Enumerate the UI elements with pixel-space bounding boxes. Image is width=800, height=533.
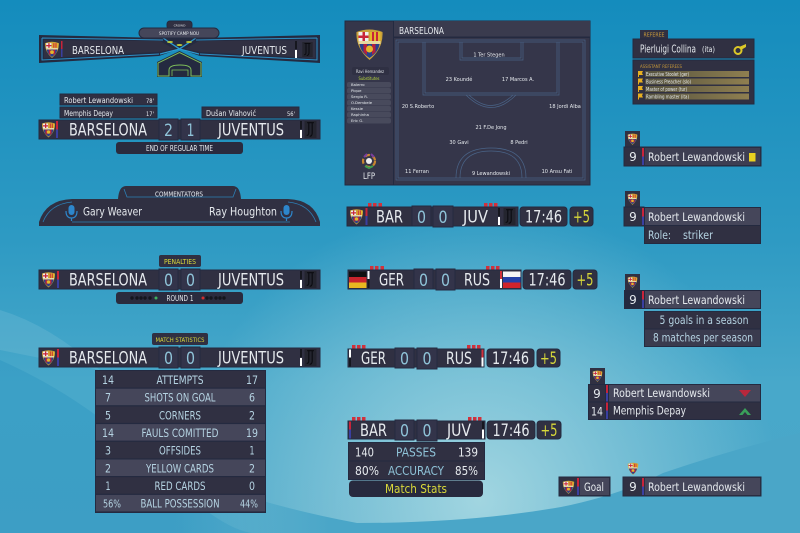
match statistics table: 0: [249, 479, 255, 493]
commentators panel: [39, 186, 320, 226]
scorebug: GER v RUS compact: GER: [361, 349, 386, 368]
scorebug: BAR v JUV compact: 0: [400, 422, 409, 442]
goal scorers: Memphis Depay: [64, 109, 113, 118]
panel: team lineup: Balerro: [351, 82, 365, 87]
referee tab: [640, 30, 668, 38]
match statistics tab: [152, 333, 208, 345]
player card: goal scorer: Robert Lewandowski: [648, 480, 745, 494]
player card: role: striker: [683, 228, 713, 242]
player card: role: [624, 191, 761, 244]
player card: role: 9: [629, 210, 637, 224]
scorebug: BAR v JUV with crests: BAR: [376, 208, 403, 226]
panel: team lineup: Substitutes: [358, 76, 380, 82]
goal scorers: Dušan Vlahović: [206, 109, 256, 118]
player card: goal scorer: 9: [629, 480, 637, 494]
match stats button: Match Stats: [385, 482, 447, 496]
scorebug: BAR v JUV with crests: JUV: [462, 208, 489, 226]
scoreboard: match statistics: 0: [186, 349, 195, 369]
scorebug: GER v RUS with flags: RUS: [464, 270, 490, 290]
panel: team lineup: 11 Ferran: [405, 169, 429, 175]
match stats button: [349, 480, 483, 497]
scoreboard: penalties: JUVENTUS: [217, 270, 284, 290]
player card: substitution: 9: [593, 387, 601, 401]
player card: season stats: Robert Lewandowski: [648, 293, 745, 307]
scorebug: GER v RUS compact: [348, 345, 560, 370]
referee panel: [633, 39, 754, 58]
assistant referees panel: Master of power (tur): [646, 87, 687, 93]
scorebug: GER v RUS with flags: [348, 266, 597, 291]
passes and accuracy table: [348, 442, 485, 480]
player card: yellow card: [624, 131, 761, 166]
penalties tab: PENALTIES: [164, 258, 196, 266]
scorebug: BAR v JUV with crests: 17:46: [525, 208, 562, 226]
panel: team lineup: 17 Marcos A.: [502, 77, 535, 83]
assistant referees panel: Business Preacher (slo): [646, 80, 691, 86]
goal scorers: 17': [146, 110, 154, 118]
passes and accuracy table: 139: [458, 444, 478, 460]
penalties tab: [159, 255, 201, 267]
player card: season stats: 9: [629, 293, 637, 307]
scoreboard: full time: 2: [164, 121, 173, 141]
scorebug: BAR v JUV with crests: +5: [573, 208, 590, 226]
scoreboard: match statistics: BARSELONA: [69, 348, 148, 368]
passes and accuracy table: 85%: [455, 463, 478, 478]
goal label: [559, 477, 610, 496]
scorebug: BAR v JUV compact: JUV: [446, 421, 472, 440]
referee tab: REFEREE: [644, 32, 665, 38]
match statistics table: YELLOW CARDS: [145, 462, 214, 476]
scorebug: GER v RUS with flags: 0: [419, 271, 428, 291]
match statistics table: [95, 370, 266, 513]
panel: team lineup: [345, 21, 590, 185]
scoreboard: full time: JUVENTUS: [217, 120, 284, 140]
scorebug: GER v RUS compact: 0: [422, 350, 432, 370]
scoreboard: match statistics: JUVENTUS: [217, 348, 284, 368]
match statistics table: RED CARDS: [154, 479, 206, 493]
match statistics table: BALL POSSESSION: [140, 496, 220, 510]
scoreboard: full time: [39, 119, 320, 141]
scorebug: BAR v JUV compact: 17:46: [492, 421, 530, 440]
scorebug: GER v RUS compact: 17:46: [492, 349, 529, 368]
stadium panel: CROWD: [174, 24, 186, 28]
scorebug: GER v RUS compact: 0: [400, 350, 409, 370]
scorebug: BAR v JUV with crests: 0: [417, 208, 426, 228]
scorebug: BAR v JUV compact: BAR: [360, 421, 387, 440]
match statistics table: 14: [102, 373, 114, 387]
match statistics table: 5: [105, 408, 111, 422]
scorebug: GER v RUS compact: +5: [540, 349, 557, 368]
goal scorers: Robert Lewandowski: [64, 96, 133, 105]
panel: team lineup: BARSELONA: [399, 26, 444, 37]
match statistics table: SHOTS ON GOAL: [144, 390, 216, 404]
penalties round bar: ROUND 1: [166, 294, 194, 303]
panel: team lineup: 9 Lewandowski: [472, 171, 510, 177]
stadium panel: SPOTIFY CAMP NOU: [159, 31, 199, 37]
panel: team lineup: Sergio R.: [351, 94, 368, 99]
scoreboard: full time: 1: [186, 121, 194, 141]
match statistics table: FAULS COMITTED: [142, 426, 219, 440]
player card: yellow card: 9: [629, 150, 637, 164]
match statistics table: 2: [105, 462, 111, 476]
player card: yellow card: Robert Lewandowski: [648, 150, 745, 164]
scorebug: GER v RUS compact: RUS: [446, 349, 472, 368]
player card: role: Role:: [648, 228, 671, 242]
panel: team lineup: 21 F.De Jong: [475, 125, 507, 131]
passes and accuracy table: PASSES: [396, 444, 436, 460]
player card: role: Robert Lewandowski: [648, 210, 745, 224]
commentators panel: Ray Houghton: [209, 204, 277, 218]
stadium panel: [39, 21, 320, 77]
player card: substitution: Memphis Depay: [613, 404, 686, 418]
panel: team lineup: 23 Koundé: [446, 76, 472, 83]
scorebug: BAR v JUV with crests: 0: [438, 208, 448, 228]
panel: team lineup: 30 Gavi: [449, 140, 469, 146]
match statistics table: CORNERS: [159, 408, 201, 422]
panel: team lineup: Kessie: [351, 106, 364, 111]
match statistics table: 44%: [240, 498, 258, 510]
scorebug: BAR v JUV compact: [348, 417, 561, 442]
assistant referees panel: Executive Stoolet (ger): [646, 72, 689, 78]
stadium panel: JUVENTUS: [241, 45, 287, 57]
panel: team lineup: 10 Ansu Fati: [542, 169, 572, 175]
panel: team lineup: 20 S.Roberto: [402, 104, 434, 110]
panel: team lineup: Raphinha: [351, 112, 369, 117]
match statistics table: 3: [105, 444, 111, 458]
scorebug: GER v RUS with flags: 17:46: [528, 270, 566, 290]
scoreboard: penalties: 0: [164, 271, 173, 291]
panel: team lineup: 1 Ter Stegen: [473, 52, 505, 58]
match statistics table: 19: [246, 426, 258, 440]
scorebug: BAR v JUV compact: 0: [422, 422, 432, 442]
assistant referees panel: [633, 60, 754, 104]
commentators panel: COMMENTATORS: [155, 190, 203, 198]
passes and accuracy table: 80%: [355, 463, 379, 478]
match statistics table: 2: [249, 408, 255, 422]
scorebug: BAR v JUV with crests: [347, 203, 593, 228]
panel: team lineup: O.Dembele: [351, 100, 373, 105]
goal scorers: [60, 94, 299, 118]
panel: team lineup: Ravi Hernandez: [356, 69, 384, 75]
scorebug: GER v RUS with flags: +5: [576, 270, 594, 290]
player card: season stats: 5 goals in a season: [660, 313, 748, 327]
scorebug: GER v RUS with flags: GER: [379, 270, 404, 290]
scoreboard: penalties: 0: [186, 271, 195, 291]
match statistics table: OFFSIDES: [159, 444, 201, 458]
penalties round bar: [116, 292, 243, 304]
panel: team lineup: Eric G.: [351, 118, 363, 123]
player card: season stats: 8 matches per season: [653, 330, 753, 344]
goal scorers: 78': [146, 97, 154, 105]
scoreboard: penalties: [39, 269, 320, 291]
panel: team lineup: Pique: [351, 88, 362, 93]
match statistics table: 56%: [103, 498, 121, 510]
match statistics table: 2: [249, 462, 255, 476]
match statistics table: 6: [249, 390, 255, 404]
scoreboard: full time: BARSELONA: [69, 120, 148, 140]
end of regular time bar: [116, 142, 243, 154]
scoreboard: match statistics: [39, 347, 320, 369]
match statistics table: 14: [102, 426, 114, 440]
assistant referees panel: Rambling master (ita): [646, 94, 689, 100]
panel: team lineup: LFP: [363, 172, 375, 182]
scorebug: GER v RUS with flags: 0: [441, 271, 450, 291]
player card: substitution: Robert Lewandowski: [613, 386, 710, 400]
referee panel: (ita): [702, 45, 715, 54]
scoreboard: penalties: BARSELONA: [69, 270, 148, 290]
commentators panel: Gary Weaver: [83, 204, 142, 218]
assistant referees panel: ASSISTANT REFEREES: [640, 64, 682, 70]
passes and accuracy table: 140: [355, 444, 374, 460]
match statistics table: ATTEMPTS: [156, 373, 204, 387]
panel: team lineup: 8 Pedri: [510, 140, 528, 146]
scoreboard: match statistics: 0: [164, 349, 173, 369]
scorebug: BAR v JUV compact: +5: [540, 421, 558, 440]
match statistics table: 1: [250, 444, 254, 458]
goal scorers: 56': [287, 110, 295, 118]
end of regular time bar: END OF REGULAR TIME: [146, 144, 213, 153]
match statistics table: 1: [106, 479, 110, 493]
stadium panel: BARSELONA: [72, 45, 125, 57]
match statistics table: 17: [246, 373, 258, 387]
player card: substitution: 14: [591, 404, 603, 418]
panel: team lineup: 18 Jordi Alba: [549, 104, 581, 110]
player card: season stats: [624, 274, 761, 347]
player card: substitution: [588, 368, 761, 420]
match statistics table: 7: [105, 390, 111, 404]
passes and accuracy table: ACCURACY: [388, 463, 444, 478]
player card: goal scorer: [623, 463, 761, 496]
referee panel: Pierluigi Collina: [640, 44, 696, 56]
goal label: Goal: [584, 480, 604, 494]
match statistics tab: MATCH STATISTICS: [156, 337, 205, 344]
